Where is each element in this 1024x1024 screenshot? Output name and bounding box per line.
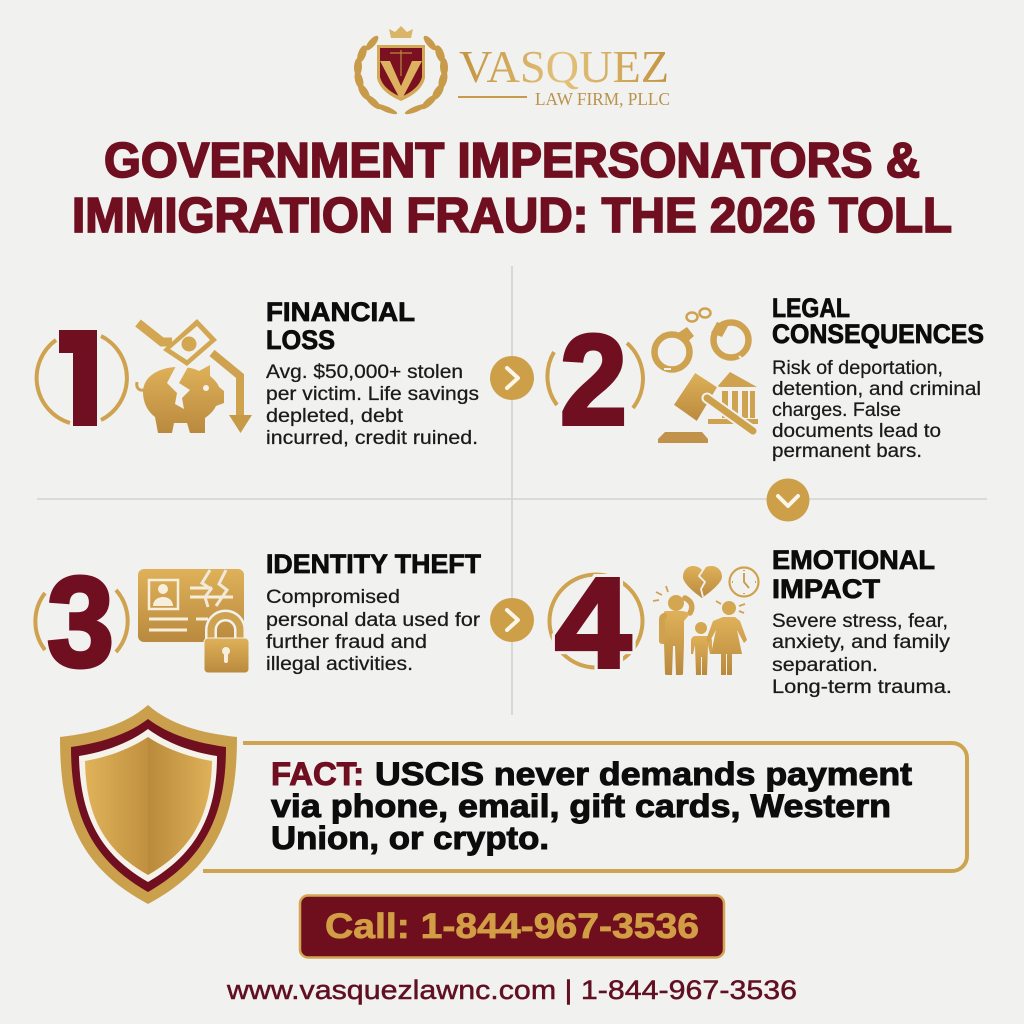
body text: Compromised	[266, 587, 400, 608]
heading: IDENTITY THEFT	[266, 549, 481, 579]
logo subtitle: LAW FIRM, PLLC	[535, 89, 670, 109]
body text: personal data used for	[266, 610, 481, 631]
icon: clock	[730, 568, 758, 596]
fact text: Union, or crypto.	[271, 820, 549, 856]
body text: documents lead to	[772, 421, 941, 442]
panel: legal consequences	[547, 293, 984, 462]
logo rule	[458, 96, 527, 98]
title: IMMIGRATION FRAUD: THE 2026 TOLL	[72, 189, 952, 243]
number 1: 1	[54, 309, 126, 452]
panel: financial loss	[37, 297, 479, 452]
icon: crown	[389, 26, 413, 38]
title	[72, 134, 952, 243]
icon: family	[653, 586, 747, 675]
heading: LEGAL	[772, 293, 850, 323]
title: GOVERNMENT IMPERSONATORS &	[104, 134, 920, 188]
icon: handcuffs	[654, 308, 748, 370]
heading	[772, 545, 935, 604]
body text: separation.	[772, 655, 878, 676]
number 2: 2	[560, 309, 627, 452]
body text: permanent bars.	[772, 441, 922, 462]
body text: illegal activities.	[266, 654, 413, 675]
body text	[266, 587, 481, 675]
body text	[266, 362, 479, 449]
body text: further fraud and	[266, 632, 427, 653]
icon: courthouse	[708, 372, 758, 424]
logo	[353, 26, 670, 116]
heading	[772, 293, 984, 349]
body text: charges. False	[772, 400, 901, 421]
body text: Risk of deportation,	[772, 358, 943, 379]
arrow: 2 to 4	[766, 478, 810, 522]
panel: emotional impact	[550, 545, 952, 698]
callout: fact box	[60, 705, 967, 904]
heading: IMPACT	[772, 574, 881, 604]
body text: anxiety, and family	[772, 632, 951, 653]
laurel left	[353, 34, 398, 116]
icon: piggy bank and falling arrow	[137, 319, 252, 433]
arrow: 3 to 4	[490, 598, 534, 642]
body text: Severe stress, fear,	[772, 611, 948, 632]
laurel right	[404, 34, 449, 116]
body text	[772, 611, 952, 698]
body text: depleted, debt	[266, 406, 404, 427]
heading: EMOTIONAL	[772, 545, 935, 575]
body text	[772, 358, 981, 462]
number 3: 3	[47, 551, 114, 694]
icon: broken id card	[138, 569, 244, 642]
number 3: 3	[47, 551, 114, 694]
logo wordmark: VASQUEZ	[459, 42, 669, 92]
body text: Avg. $50,000+ stolen	[266, 362, 463, 383]
number 4: 4	[555, 552, 631, 695]
fact text	[271, 756, 912, 856]
icon: gavel	[658, 372, 753, 443]
body text: Long-term trauma.	[772, 677, 952, 698]
footer contact line: www.vasquezlawnc.com | 1-844-967-3536	[226, 975, 797, 1005]
call button: Call: 1-844-967-3536	[325, 907, 699, 946]
heading: FINANCIAL	[266, 297, 415, 327]
fact text: via phone, email, gift cards, Western	[271, 788, 891, 824]
body text: incurred, credit ruined.	[266, 428, 478, 449]
icon: broken heart	[683, 566, 722, 598]
fact text: FACT:	[271, 756, 364, 792]
heading: LOSS	[266, 325, 335, 355]
arrow: 1 to 2	[490, 356, 534, 400]
body text: detention, and criminal	[772, 379, 981, 400]
number 1	[34, 330, 129, 426]
icon: padlock	[204, 616, 249, 673]
fact text: USCIS never demands payment	[375, 756, 912, 792]
heading: CONSEQUENCES	[772, 319, 984, 349]
panel: identity theft	[35, 549, 481, 694]
logo shield	[377, 45, 425, 101]
number 4: 4	[555, 552, 631, 695]
body text: per victim. Life savings	[266, 384, 479, 405]
call button	[300, 896, 724, 958]
heading	[266, 297, 415, 355]
number 2: 2	[560, 309, 627, 452]
icon: shield	[60, 705, 237, 904]
